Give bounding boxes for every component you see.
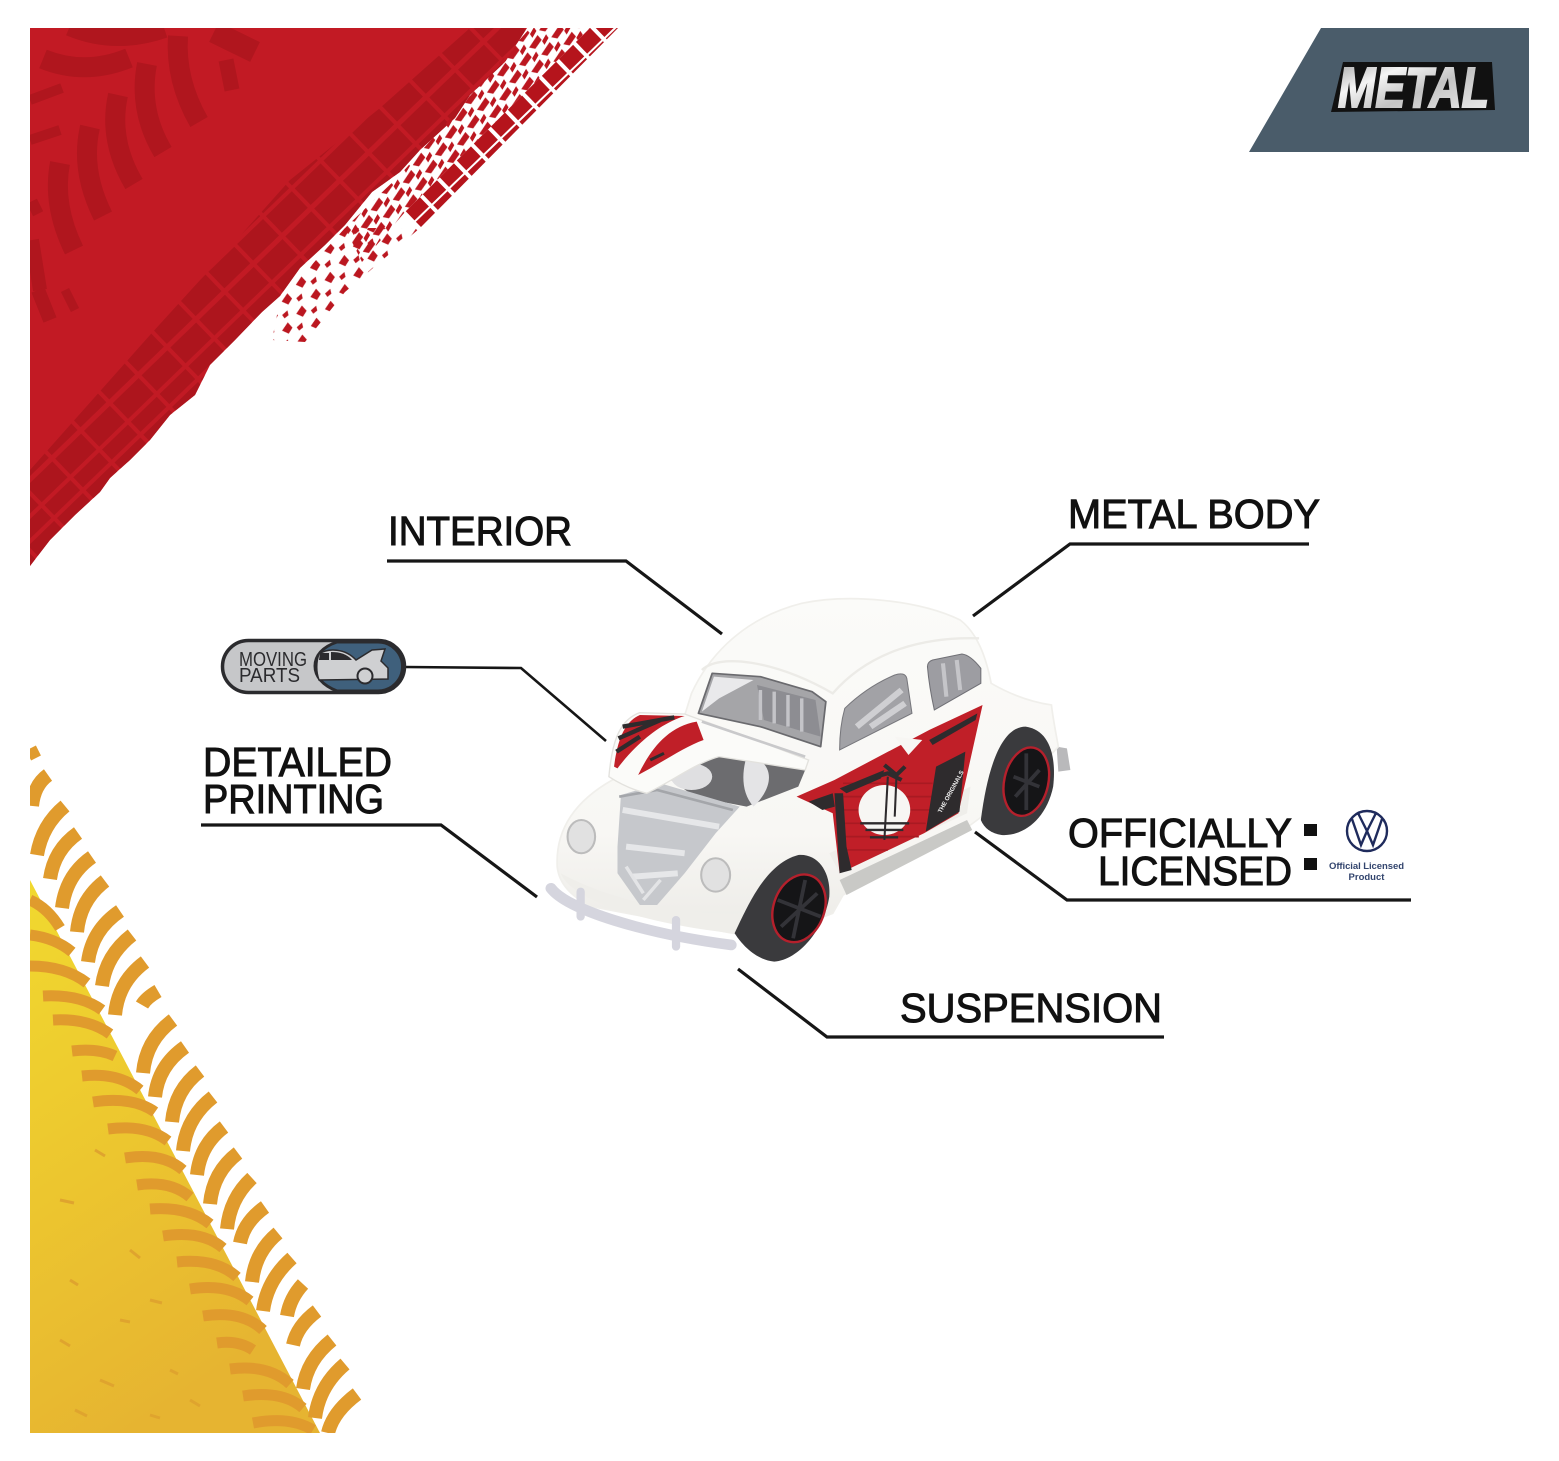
car icon with open hood [317, 649, 388, 684]
door graphic text: THE ORIGINALS [937, 770, 966, 814]
label: interior: INTERIOR [388, 508, 572, 554]
running board [840, 820, 972, 895]
blue pill end [315, 642, 402, 691]
fender shading [561, 787, 970, 933]
rear wheel [981, 727, 1055, 835]
icon: VW logo [1347, 811, 1387, 851]
panel: red tyre track corner [30, 26, 618, 566]
front bumper [551, 888, 731, 947]
panel: yellow tyre track corner [30, 748, 357, 1433]
metal logo plate [1331, 62, 1495, 112]
label: suspension: SUSPENSION [900, 985, 1162, 1031]
label: officially licensed: LICENSED [1098, 848, 1292, 894]
car body [557, 599, 1058, 933]
moving parts text: MOVING [239, 649, 307, 671]
squares beside licensed label [1304, 824, 1317, 870]
side window [840, 674, 912, 750]
leader lines [201, 544, 1411, 1037]
official licensed product text: Official Licensed [1329, 861, 1404, 872]
official licensed product text: Product [1349, 872, 1385, 883]
roof crease [702, 638, 979, 693]
engine bay [617, 753, 805, 905]
badge: METAL [1249, 28, 1529, 152]
label: detailed printing: PRINTING [203, 776, 384, 822]
windshield and interior [698, 673, 826, 747]
badge background [1249, 28, 1529, 152]
dense tread fragments [345, 28, 590, 262]
moving parts text: PARTS [239, 665, 300, 687]
palm sun emblem [859, 785, 910, 835]
yellow surface flecks [60, 1150, 200, 1418]
front wheel [735, 855, 834, 962]
label: metal body: METAL BODY [1068, 491, 1320, 537]
sparse tread fragments [272, 228, 420, 342]
label: officially licensed: OFFICIALLY [1068, 810, 1292, 856]
inner tread marks [30, 900, 313, 1430]
open hood [609, 713, 809, 793]
door graphic [797, 705, 983, 873]
badge: moving parts [222, 640, 404, 692]
rear bumper [1057, 747, 1070, 772]
left headlight [568, 820, 595, 853]
metal wordmark: METAL [1338, 56, 1489, 120]
outer broken tread row [405, 28, 618, 228]
label: detailed printing: DETAILED [203, 739, 392, 785]
red triangle [30, 28, 527, 566]
curved tread arcs [30, 26, 255, 320]
car: white beetle [551, 599, 1070, 962]
darker tread blocks [30, 28, 527, 566]
rear window [927, 654, 981, 710]
yellow triangle [30, 880, 320, 1433]
outer tread marks [31, 748, 357, 1433]
pill [222, 640, 404, 692]
right headlight [701, 858, 730, 892]
